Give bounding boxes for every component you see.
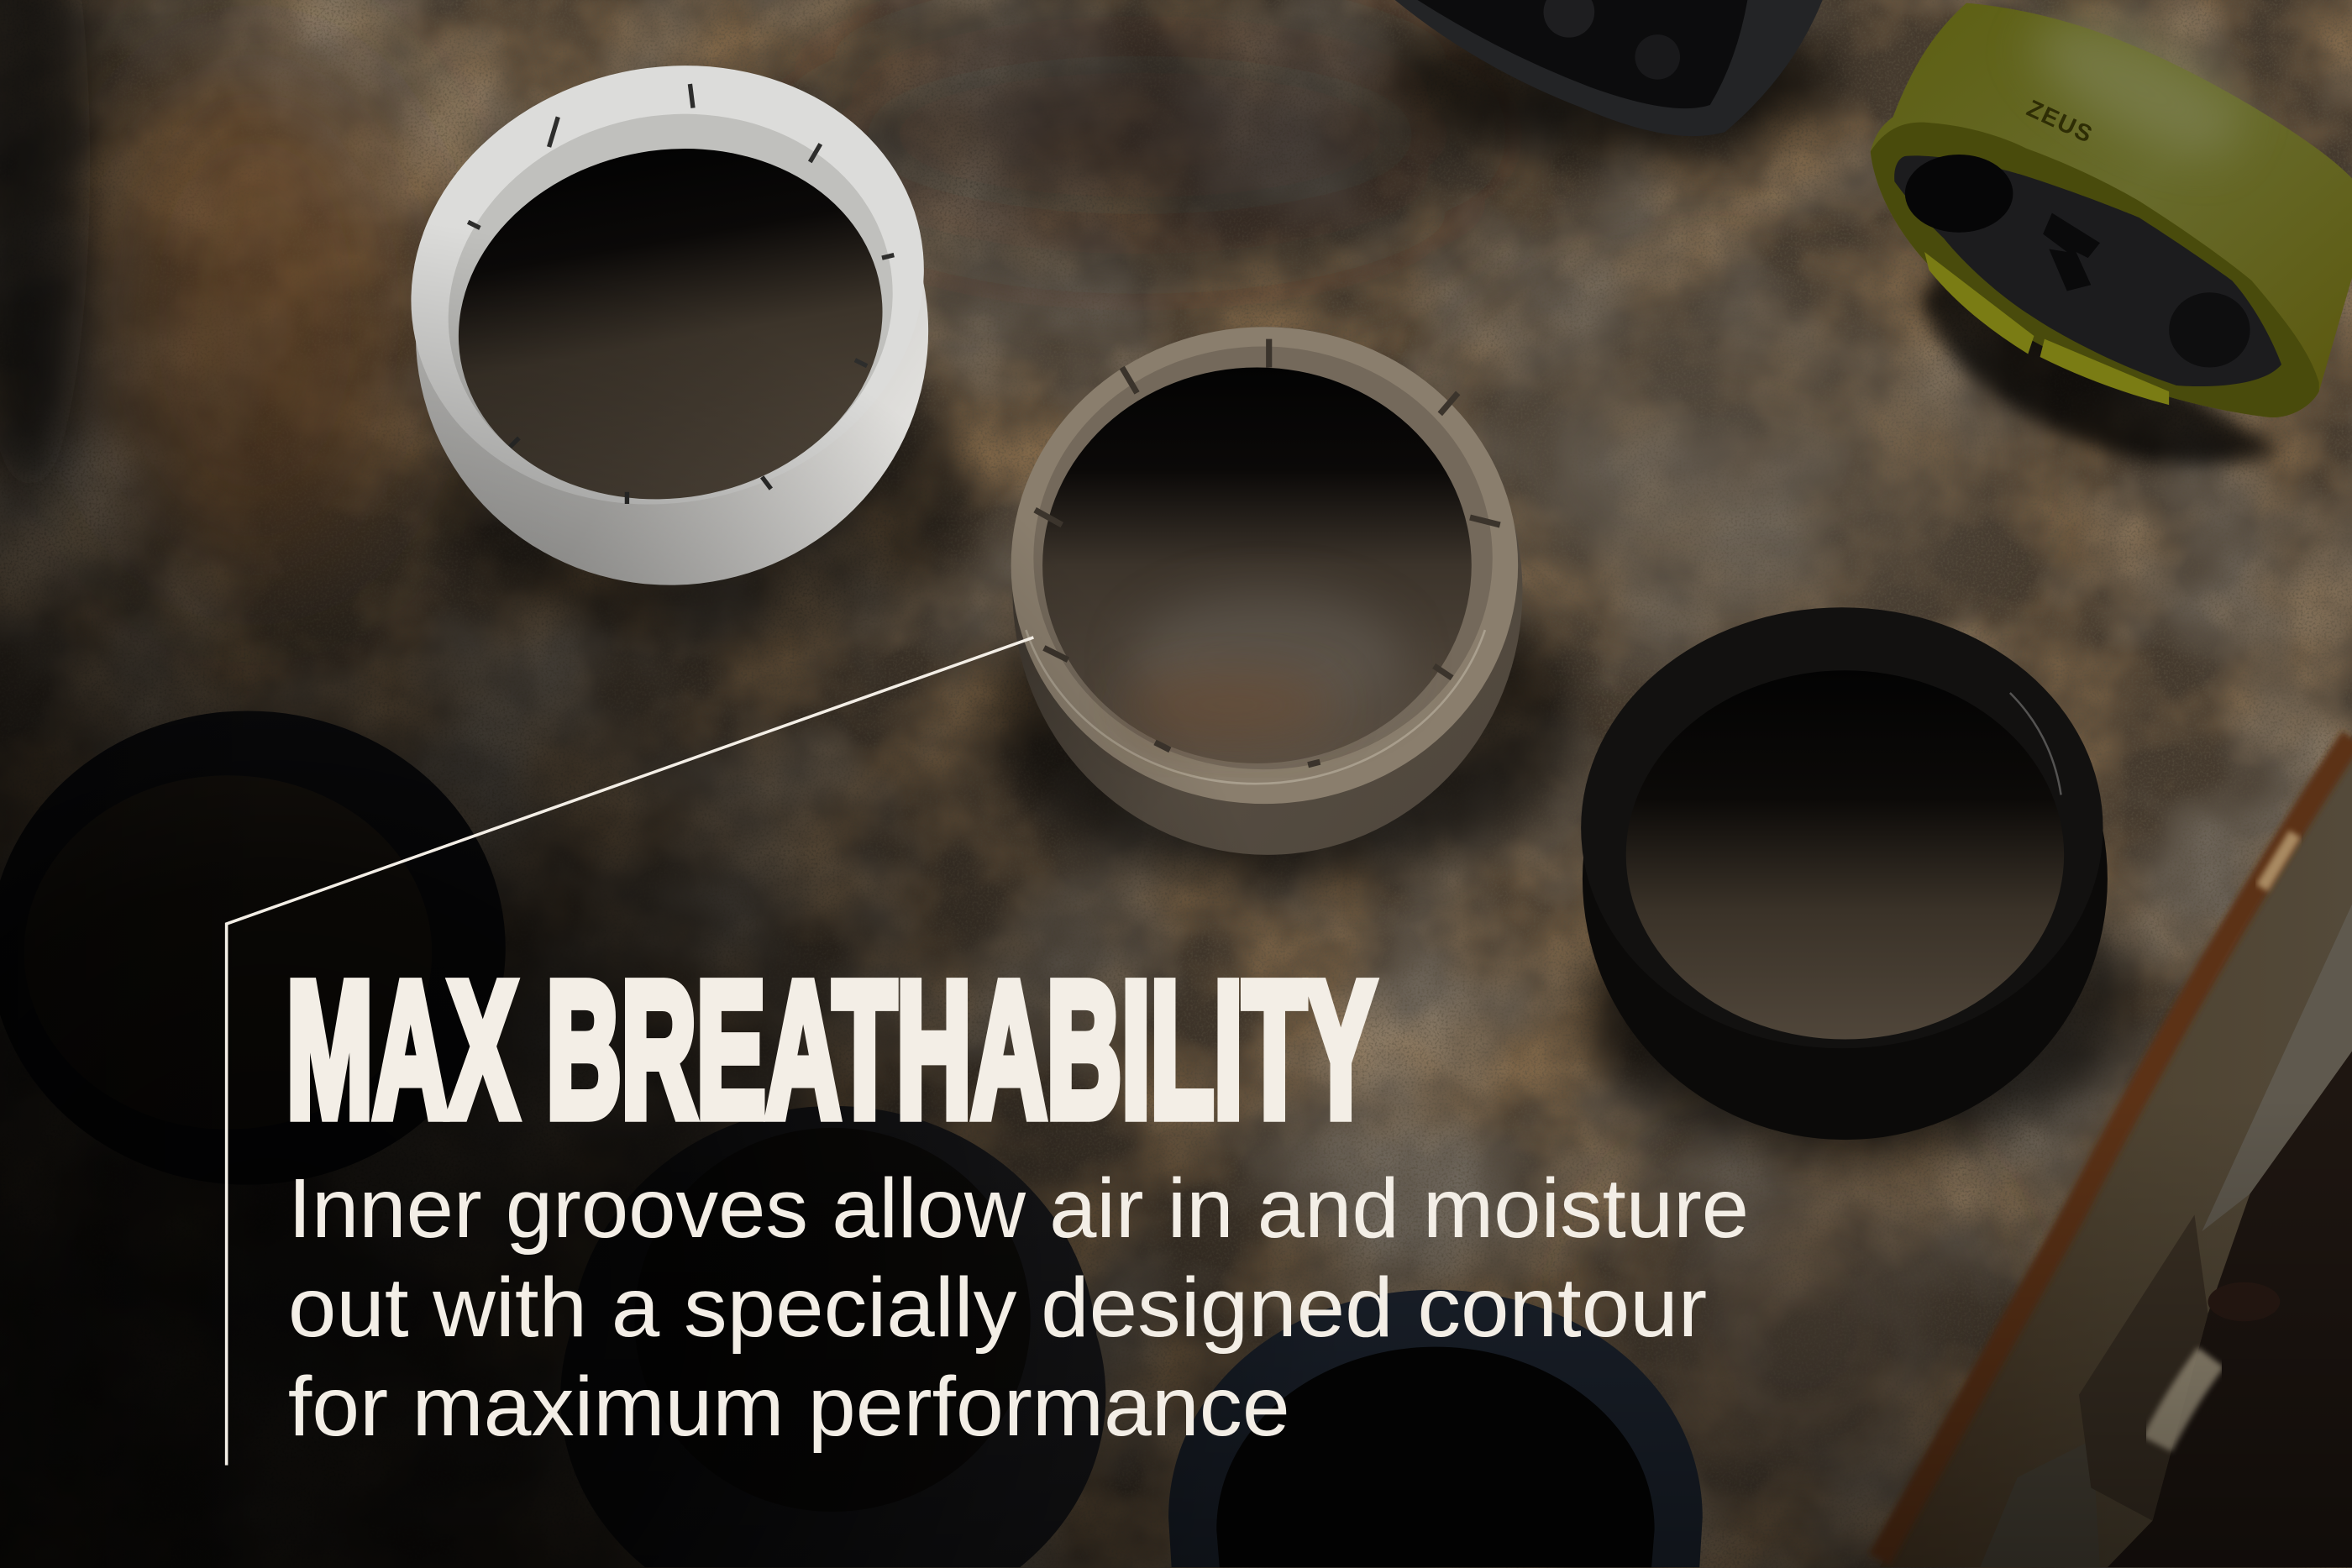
hole: white ring opening [431, 116, 911, 532]
ring: navy bottom right [1168, 1290, 1703, 1567]
body text: out with a specially designed contour [288, 1261, 1707, 1355]
ring: white [369, 18, 975, 645]
ring: black bottom centre [560, 1106, 1105, 1567]
rusted metal tray, bottom right [1880, 735, 2352, 1567]
body text: for maximum performance [288, 1360, 1290, 1454]
ring: olive with ZEUS lettering [1871, 0, 2352, 465]
heading: MAX BREATHABILITY [286, 943, 1375, 1157]
ring: tan, callout target [990, 327, 1575, 885]
ring: black right [1581, 607, 2138, 1155]
callout leader line [227, 637, 1033, 1466]
body text [288, 1162, 1749, 1454]
ring: dark grey top [1388, 0, 1838, 158]
ring: olive with ZEUS lettering: ZEUS [2023, 95, 2097, 149]
hole: tan ring opening [1042, 368, 1472, 763]
body text: Inner grooves allow air in and moisture [288, 1162, 1749, 1256]
hole: black ring opening [1626, 670, 2064, 1040]
ring: black left [0, 711, 506, 1185]
